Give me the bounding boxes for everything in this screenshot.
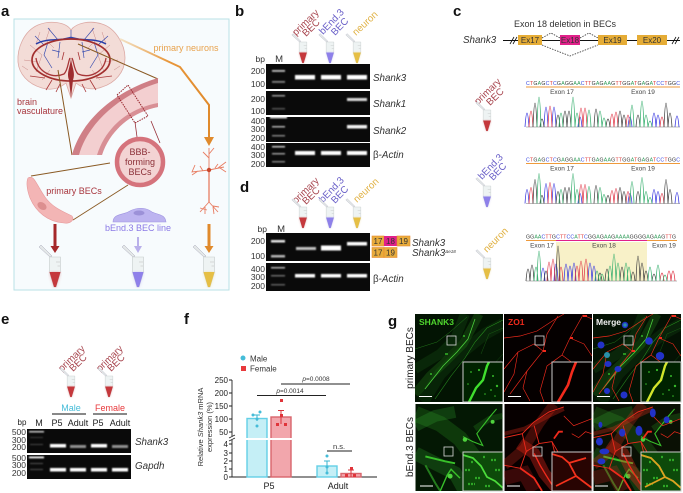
y axis: 2 (224, 457, 229, 466)
bp labels: 200 (251, 66, 265, 76)
tube label primary BEC: BEC (484, 86, 507, 108)
gene labels: Shank3 (412, 248, 445, 259)
bp labels (251, 224, 285, 291)
BBB-forming BECs: forming (125, 157, 155, 167)
insets row two (463, 452, 681, 491)
significance brackets (257, 376, 352, 451)
panel letter c: c (453, 3, 461, 20)
zoom boxes and scale bars (419, 336, 633, 486)
gel Gapdh (27, 455, 131, 479)
gene labels (135, 437, 169, 472)
image SHANK3 primary (415, 314, 503, 402)
bp labels: M (277, 224, 285, 235)
tube bEnd.3 (122, 245, 144, 287)
y axis: 250 (215, 376, 229, 385)
y axis title: expression (%) (205, 401, 214, 452)
y axis (215, 376, 377, 482)
exon diagram: Ex17 (521, 36, 540, 45)
chromatogram primary BEC: CTGAGCTCGAGGAACTTGAGAAGTTGGATGAGATCCTGGC (526, 81, 680, 87)
bp labels: 200 (251, 281, 265, 291)
bp labels: 300 (251, 272, 265, 282)
lane labels: P5 (92, 418, 104, 428)
bp labels: 300 (12, 435, 26, 445)
arrow neuron (204, 224, 214, 253)
y axis: 150 (215, 402, 229, 411)
panel g: immunofluorescence (388, 313, 681, 491)
arrowhead to neuron (204, 137, 214, 146)
panel letter f: f (184, 311, 190, 328)
panel a: experimental scheme (1, 3, 229, 290)
chromatogram primary BEC: Exon 19 (631, 89, 655, 96)
chromatogram primary BEC (525, 81, 680, 127)
row label primary BECs: primary BECs (405, 327, 416, 389)
y axis: 100 (215, 415, 229, 424)
exon boxes: 19 (386, 248, 395, 258)
bars (245, 417, 361, 477)
tube label bEnd.3 BEC (476, 152, 509, 207)
exon diagram: Ex19 (603, 36, 622, 45)
brain vasculature label: vasculature (17, 106, 63, 116)
tube label bEnd.3 BEC: BEC (487, 161, 509, 183)
significance brackets: p=0.0014 (275, 388, 304, 395)
y axis: 200 (215, 389, 229, 398)
exon boxes: 17 (374, 248, 383, 258)
gene labels: Δe18 (444, 249, 456, 254)
tube labels and tubes: primary (290, 7, 322, 38)
bp labels: 100 (251, 251, 265, 261)
image merge primary (593, 314, 681, 402)
y axis: 0 (224, 473, 229, 482)
bp labels: 200 (251, 159, 265, 169)
y axis: 3 (224, 449, 229, 458)
y axis title: Relative Shank3 mRNA (196, 388, 205, 466)
tube label primary BEC: primary (472, 76, 504, 107)
bp labels: 400 (251, 264, 265, 274)
bp labels: 200 (251, 133, 265, 143)
callout lines from brain to vessel (58, 44, 158, 155)
x axis labels: P5 (263, 481, 275, 491)
exon boxes: 18 (386, 237, 395, 246)
legend (240, 354, 277, 374)
tube labels and tubes: BEC (67, 352, 90, 374)
arrow bEnd.3 (134, 237, 142, 253)
tube labels and tubes: bEnd.3 (317, 7, 347, 37)
channel labels: Merge (596, 317, 621, 327)
panel c: exon diagram and chromatograms (453, 3, 680, 281)
y axis title (196, 388, 214, 466)
bEnd.3 BEC line label: bEnd.3 BEC line (105, 223, 171, 233)
gel beta-actin (266, 143, 370, 167)
gel Shank2 (266, 116, 370, 142)
Shank3 gene label: Shank3 (463, 35, 497, 46)
channel labels: ZO1 (508, 317, 525, 327)
channel labels (419, 317, 621, 327)
gene labels (373, 238, 456, 285)
bp labels: 500 (12, 427, 26, 437)
primary BECs label: primary BECs (46, 186, 102, 196)
lane labels: P5 (51, 418, 63, 428)
significance brackets: n.s. (333, 442, 345, 451)
primary neurons path (120, 39, 209, 143)
y axis: 4 (224, 440, 229, 449)
tube labels and tubes: primary (94, 343, 126, 374)
bEnd.3 cell (113, 208, 166, 222)
bp labels: 300 (251, 124, 265, 134)
lane labels: M (35, 418, 43, 428)
exon diagram: Ex18 (561, 36, 580, 45)
bp labels (251, 54, 283, 169)
tube labels and tubes: BEC (105, 352, 128, 374)
bp labels (12, 427, 26, 478)
brown lines to primary BEC (31, 163, 128, 220)
gel beta-actin d (266, 263, 370, 291)
panel f: bar chart (184, 311, 377, 491)
exon diagram: Ex20 (643, 36, 662, 45)
y axis: 1 (224, 465, 229, 474)
bp labels: 100 (251, 106, 265, 116)
BBB-forming BECs (117, 121, 163, 185)
gene labels: Shank2 (373, 126, 407, 137)
tube labels and tubes: neuron (352, 176, 381, 205)
bp labels: 500 (12, 453, 26, 463)
gel Shank1 (266, 91, 370, 115)
BBB-forming BECs: BECs (128, 167, 152, 177)
tube label bEnd.3 BEC: bEnd.3 (476, 152, 506, 182)
y axis: 50 (219, 428, 229, 437)
brain vasculature (18, 22, 125, 98)
group headings Male and Female: Female (95, 403, 125, 413)
bp labels: bp (258, 224, 267, 234)
tube labels and tubes (290, 7, 380, 63)
panel letter g: g (388, 313, 397, 330)
BBB-forming BECs: BBB- (129, 147, 151, 157)
tube labels and tubes: BEC (329, 184, 351, 206)
group headings Male and Female: Male (61, 403, 81, 413)
panel letter b: b (235, 3, 244, 20)
legend: Male (250, 354, 268, 364)
panel d: exon 18 deletion gel (240, 175, 456, 291)
lane labels (18, 418, 131, 428)
tube labels and tubes: neuron (351, 9, 380, 38)
tube label neuron (476, 226, 511, 279)
bp labels: bp (256, 54, 265, 64)
bp labels: M (275, 54, 283, 65)
error bars and data points (252, 399, 356, 477)
chromatogram neuron: GGAACTTGCTTCCATTCGGAGAAGAAAAGGGGAGAAGTTG (526, 234, 676, 240)
image merge bEnd.3 (593, 404, 681, 491)
tube labels and tubes: primary (56, 343, 88, 374)
vessel section (72, 78, 158, 155)
channel labels: SHANK3 (419, 317, 454, 327)
panel letter d: d (240, 179, 249, 196)
gel Shank3 exon 18 (266, 233, 370, 261)
gene labels: β-Actin (373, 150, 404, 161)
image SHANK3 bEnd.3 (415, 404, 503, 491)
bp labels: 100 (251, 79, 265, 89)
tube labels and tubes: bEnd.3 (317, 175, 347, 205)
panel letter a: a (1, 3, 10, 20)
exon boxes: 19 (399, 237, 408, 246)
arrow primary BEC (50, 224, 60, 253)
chromatogram neuron (526, 234, 677, 281)
tube neuron (193, 245, 214, 287)
chromatogram bEnd.3 BEC (525, 158, 680, 204)
bp labels: 200 (12, 442, 26, 452)
lane labels: bp (18, 418, 27, 427)
gel Shank3 e (27, 429, 131, 453)
tube label neuron: neuron (481, 226, 511, 255)
scheme background frame (14, 19, 229, 290)
primary neurons label: primary neurons (153, 43, 219, 53)
image ZO1 bEnd.3 (504, 404, 592, 491)
tube primary BEC (39, 245, 60, 287)
lane labels: Adult (110, 418, 131, 428)
x axis labels: Adult (328, 481, 349, 491)
panel letter e: e (1, 311, 9, 328)
bp labels: 200 (12, 468, 26, 478)
lane labels: Adult (68, 418, 89, 428)
x axis labels (263, 481, 349, 491)
brain vasculature label: brain (17, 97, 37, 107)
gene labels: β-Actin (373, 274, 404, 285)
legend: Female (250, 364, 277, 374)
chromatogram neuron: Exon 18 (592, 242, 616, 250)
chromatogram neuron: Exon 17 (530, 242, 554, 250)
insets row one (463, 362, 681, 402)
bp labels: 300 (12, 460, 26, 470)
tube labels and tubes: BEC (300, 185, 323, 207)
tube labels and tubes (290, 175, 381, 228)
tube label primary BEC (472, 76, 507, 131)
bp labels: 300 (251, 150, 265, 160)
row label bEnd.3 BECs: bEnd.3 BECs (405, 417, 416, 477)
chromatogram neuron: Exon 19 (652, 242, 676, 250)
bp labels: 400 (251, 116, 265, 126)
image ZO1 primary (504, 314, 592, 402)
bp labels: 400 (251, 142, 265, 152)
brain vasculature label (17, 97, 63, 116)
gene labels: Shank1 (373, 99, 406, 110)
tube labels and tubes: BEC (329, 16, 351, 38)
gene labels: Shank3 (373, 73, 407, 84)
exon boxes: 17 (374, 237, 383, 246)
group headings Male and Female (52, 403, 127, 414)
panel b: RT-PCR gels (235, 3, 407, 169)
significance brackets: p=0.0008 (301, 376, 330, 383)
bp labels: 200 (251, 236, 265, 246)
exon diagram (503, 33, 680, 56)
primary BEC cell (27, 177, 73, 223)
gel Shank3 (266, 64, 370, 89)
tube labels and tubes: BEC (300, 17, 323, 39)
tube labels and tubes (56, 343, 128, 397)
gene labels: Gapdh (135, 461, 164, 472)
panel e: sex-specific gels (1, 311, 169, 479)
bp labels: 200 (251, 94, 265, 104)
tube labels and tubes: primary (290, 175, 322, 206)
gene labels: Shank3 (412, 238, 446, 249)
gene labels (373, 73, 407, 161)
exon boxes (372, 236, 410, 258)
gene labels: Shank3 (135, 437, 169, 448)
neuron (192, 148, 226, 214)
diagram title: Exon 18 deletion in BECs (514, 19, 617, 29)
chromatogram primary BEC: Exon 17 (550, 89, 574, 96)
